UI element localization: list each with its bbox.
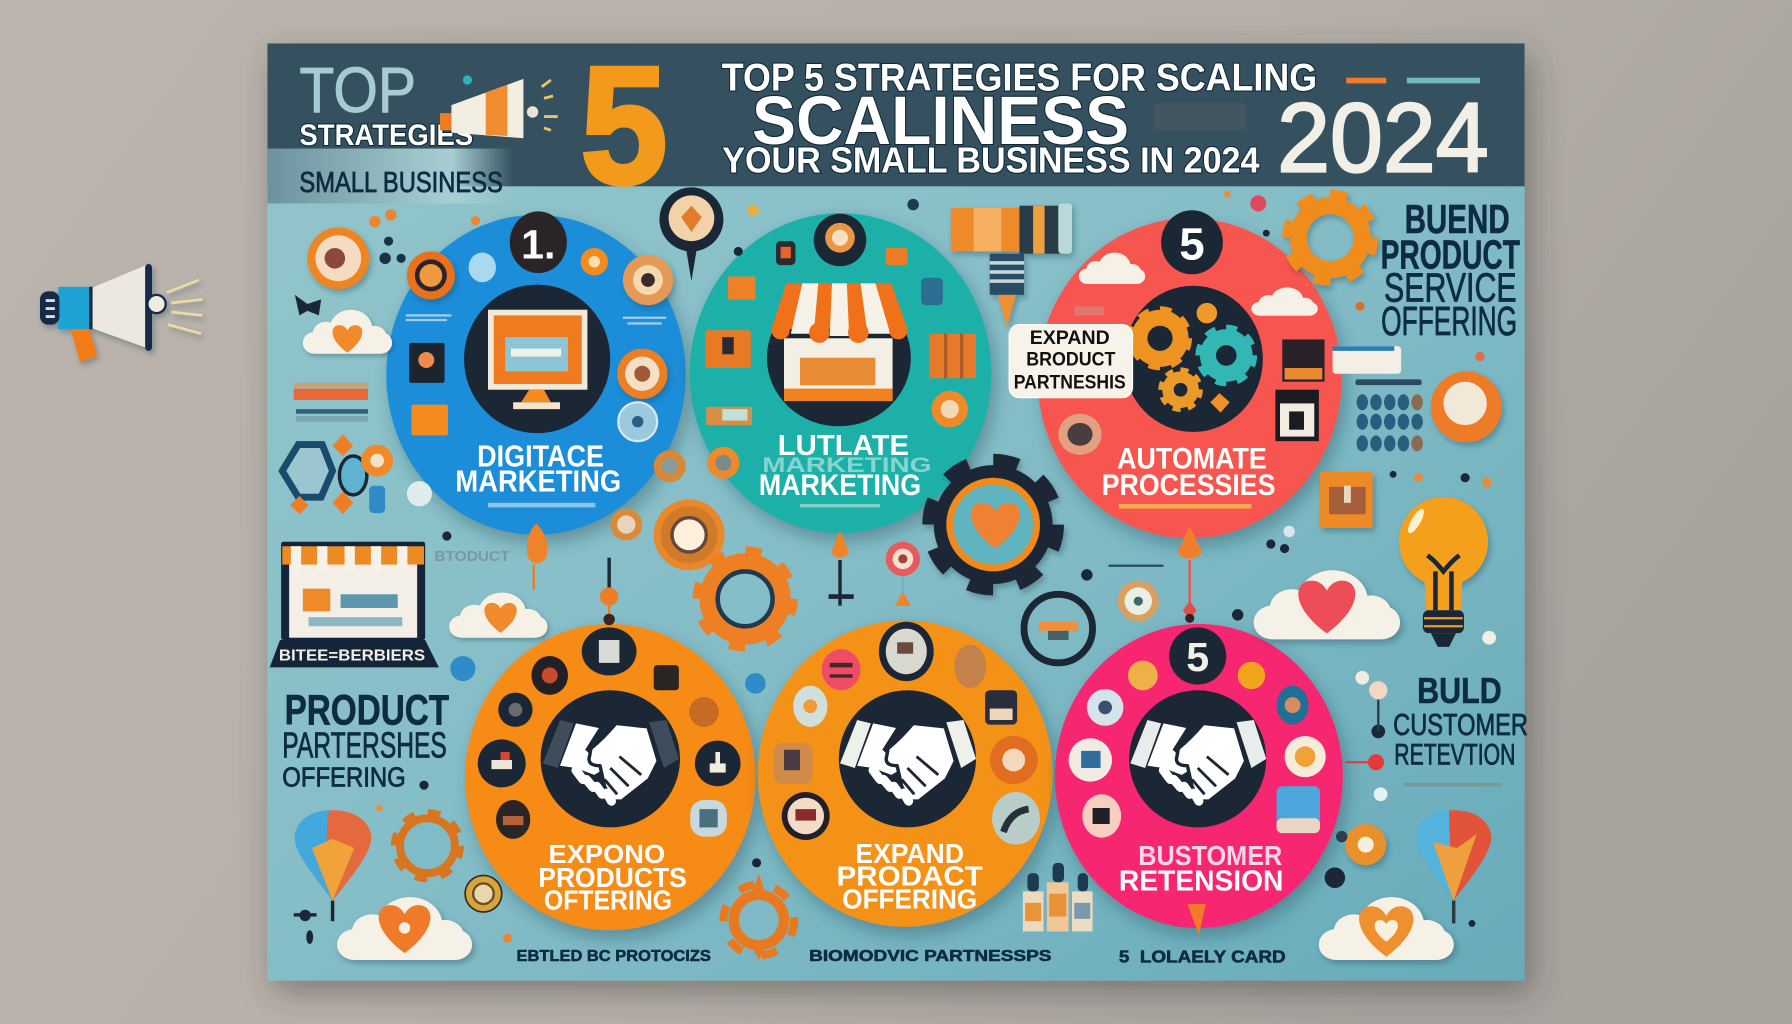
strategy 1 label: DIGITACE (477, 438, 604, 473)
icon: light bulb (1399, 497, 1488, 647)
left heading product partnerships offering: PARTERSHES (282, 725, 447, 766)
right heading buend product service offering: BUEND (1405, 196, 1510, 242)
center disc with handshake (839, 690, 976, 827)
icons ring 5 (774, 645, 1040, 845)
main title: YOUR SMALL BUSINESS IN 2024 (722, 140, 1260, 181)
icon: cloud bottom right with heart (1319, 897, 1454, 960)
strategy 4 label: PRODUCTS (538, 862, 687, 893)
icon: top telescope hammer (951, 203, 1072, 327)
strategy 6 label (1119, 840, 1283, 897)
icon: orange button (1431, 371, 1502, 442)
number badge 1: 1. (521, 221, 555, 267)
icon: orange ring coin (1345, 824, 1386, 865)
right heading build customer retention (1393, 670, 1528, 786)
icons ring 3 (1058, 306, 1401, 455)
scattered small marks (369, 191, 1496, 943)
panel: strategy 2 affiliate marketing (690, 213, 991, 533)
left heading product partnerships offering: OFFERING (282, 761, 406, 792)
faint product text: BTODUCT (434, 549, 510, 565)
strategy 5 label: EXPAND (855, 838, 964, 869)
strategy 1 label: MARKETING (455, 463, 621, 498)
panel: strategy 5 expand product offering (758, 621, 1053, 927)
icon: top pin coin (659, 187, 723, 281)
main title (722, 56, 1317, 181)
right heading buend product service offering (1381, 196, 1520, 344)
right heading build customer retention: CUSTOMER (1393, 707, 1528, 742)
center disc with storefront (767, 283, 911, 426)
strategy 5 label: OFFERING (842, 884, 977, 915)
icon: gold coin (465, 875, 502, 912)
bottom labels (517, 946, 1286, 966)
icon: orange square (1320, 472, 1373, 528)
strategy 3 label: AUTOMATE (1117, 443, 1267, 476)
dot grid icons (1355, 379, 1423, 451)
text strips left (294, 383, 368, 422)
header title block left (299, 54, 503, 199)
icon: bow tie (295, 295, 321, 315)
center disc with handshake (541, 690, 680, 827)
callout expand product partnerships: PARTNESHIS (1014, 372, 1126, 394)
top badge (582, 627, 637, 675)
callout expand product partnerships: BRODUCT (1026, 349, 1116, 371)
icon: top right orange gear (1288, 195, 1373, 280)
strategy 5 label (837, 838, 983, 915)
icons ring 2 (705, 241, 976, 427)
strategy 2 label: LUTLATE (778, 430, 909, 462)
right heading buend product service offering: OFFERING (1381, 298, 1517, 344)
number badge 5 (1161, 210, 1223, 274)
strategy 4 label: EXPONO (549, 839, 665, 869)
icon: cloud with orange heart left (303, 310, 392, 354)
panel: strategy 6 customer retention (1055, 624, 1343, 935)
panel: strategy 4 expand products offering (465, 624, 755, 930)
icon: balloon left (294, 810, 371, 944)
big number 5: 5 (581, 33, 667, 219)
header band (267, 43, 1525, 186)
connector to retention heading (1345, 671, 1387, 770)
number badge 5 (1169, 627, 1226, 685)
panel: strategy 1 digital marketing (386, 211, 686, 535)
icon: cloud with red heart (1254, 570, 1400, 639)
center disc with handshake (1129, 690, 1266, 827)
bottom labels: BIOMODVIC PARTNESSPS (809, 948, 1052, 965)
right heading buend product service offering: PRODUCT (1381, 232, 1520, 278)
clouds on coral (1079, 253, 1318, 316)
header title block left: STRATEGIES (299, 119, 473, 152)
icons ring 1 (406, 248, 673, 441)
right heading build customer retention: RETEVTION (1394, 739, 1515, 772)
main title: SCALINESS (752, 82, 1129, 159)
poster panel (267, 43, 1525, 981)
right heading buend product service offering: SERVICE (1384, 265, 1517, 311)
callout expand product partnerships: EXPAND (1030, 327, 1110, 349)
connector pins and small coins centre (527, 447, 1202, 625)
strategy 3 label (1102, 443, 1275, 509)
icon: laptop with store awning (270, 542, 439, 667)
right heading build customer retention: BULD (1417, 670, 1502, 711)
icon: dark ring target (1024, 594, 1093, 663)
callout expand product partnerships (1009, 325, 1133, 398)
strategy 2 label: MARKETING (759, 469, 921, 502)
icon: cloud bottom left with heart (337, 897, 472, 960)
main title: TOP 5 STRATEGIES FOR SCALING (722, 56, 1317, 99)
icon: orange lower gear (723, 873, 794, 960)
header accent bars (1154, 78, 1480, 130)
strategy 4 label (538, 839, 687, 916)
header title block left: TOP (299, 54, 416, 126)
header title block left: SMALL BUSINESS (299, 167, 503, 199)
icon: hex rings left (282, 434, 432, 514)
icon: header megaphone (440, 75, 558, 138)
strategy 4 label: OFTERING (544, 885, 672, 916)
left heading product partnerships offering: PRODUCT (285, 687, 449, 734)
strategy 5 label: PRODACT (837, 861, 983, 892)
strategy 1 label (455, 438, 621, 507)
left heading product partnerships offering (282, 687, 449, 792)
icon: gear left (394, 813, 461, 879)
icon: bottles (1023, 863, 1093, 931)
bottom labels: EBTLED BC PROTOCIZS (517, 948, 711, 965)
number badge 5: 5 (1179, 218, 1205, 269)
icon: cloud with orange heart centre left (449, 592, 547, 638)
icon: large dark gear with heart (930, 462, 1056, 587)
strategy 2 label (759, 430, 931, 507)
strategy 6 label: BUSTOMER (1138, 840, 1282, 871)
strategy 6 label: RETENSION (1119, 865, 1283, 897)
year 2024: 2024 (1277, 82, 1489, 192)
panel: strategy 3 automate processes (1009, 210, 1401, 538)
center disc with monitor (464, 285, 610, 433)
number badge 5: 5 (1186, 634, 1209, 680)
icon: laptop with store awning: BITEE=BERBIERS (279, 648, 425, 665)
center disc with gears (1123, 286, 1263, 432)
icons ring 6 (1069, 661, 1326, 935)
icon: orange gear ring (697, 551, 793, 647)
number badge 2 (814, 214, 866, 266)
top badge (879, 622, 934, 681)
icon: orange coin top left (307, 227, 369, 289)
number badge 1 (510, 211, 567, 273)
icon: megaphone on background (40, 264, 202, 362)
icon: orange sun coin (654, 499, 725, 570)
strategy 3 label: PROCESSIES (1102, 469, 1275, 502)
icon: small coin (1118, 581, 1159, 622)
bottom labels: 5 LOLAELY CARD (1119, 946, 1286, 966)
strategy 2 label: MARKETING (762, 452, 931, 477)
icon: balloon right (1416, 810, 1491, 927)
icons ring 4 (478, 656, 741, 839)
